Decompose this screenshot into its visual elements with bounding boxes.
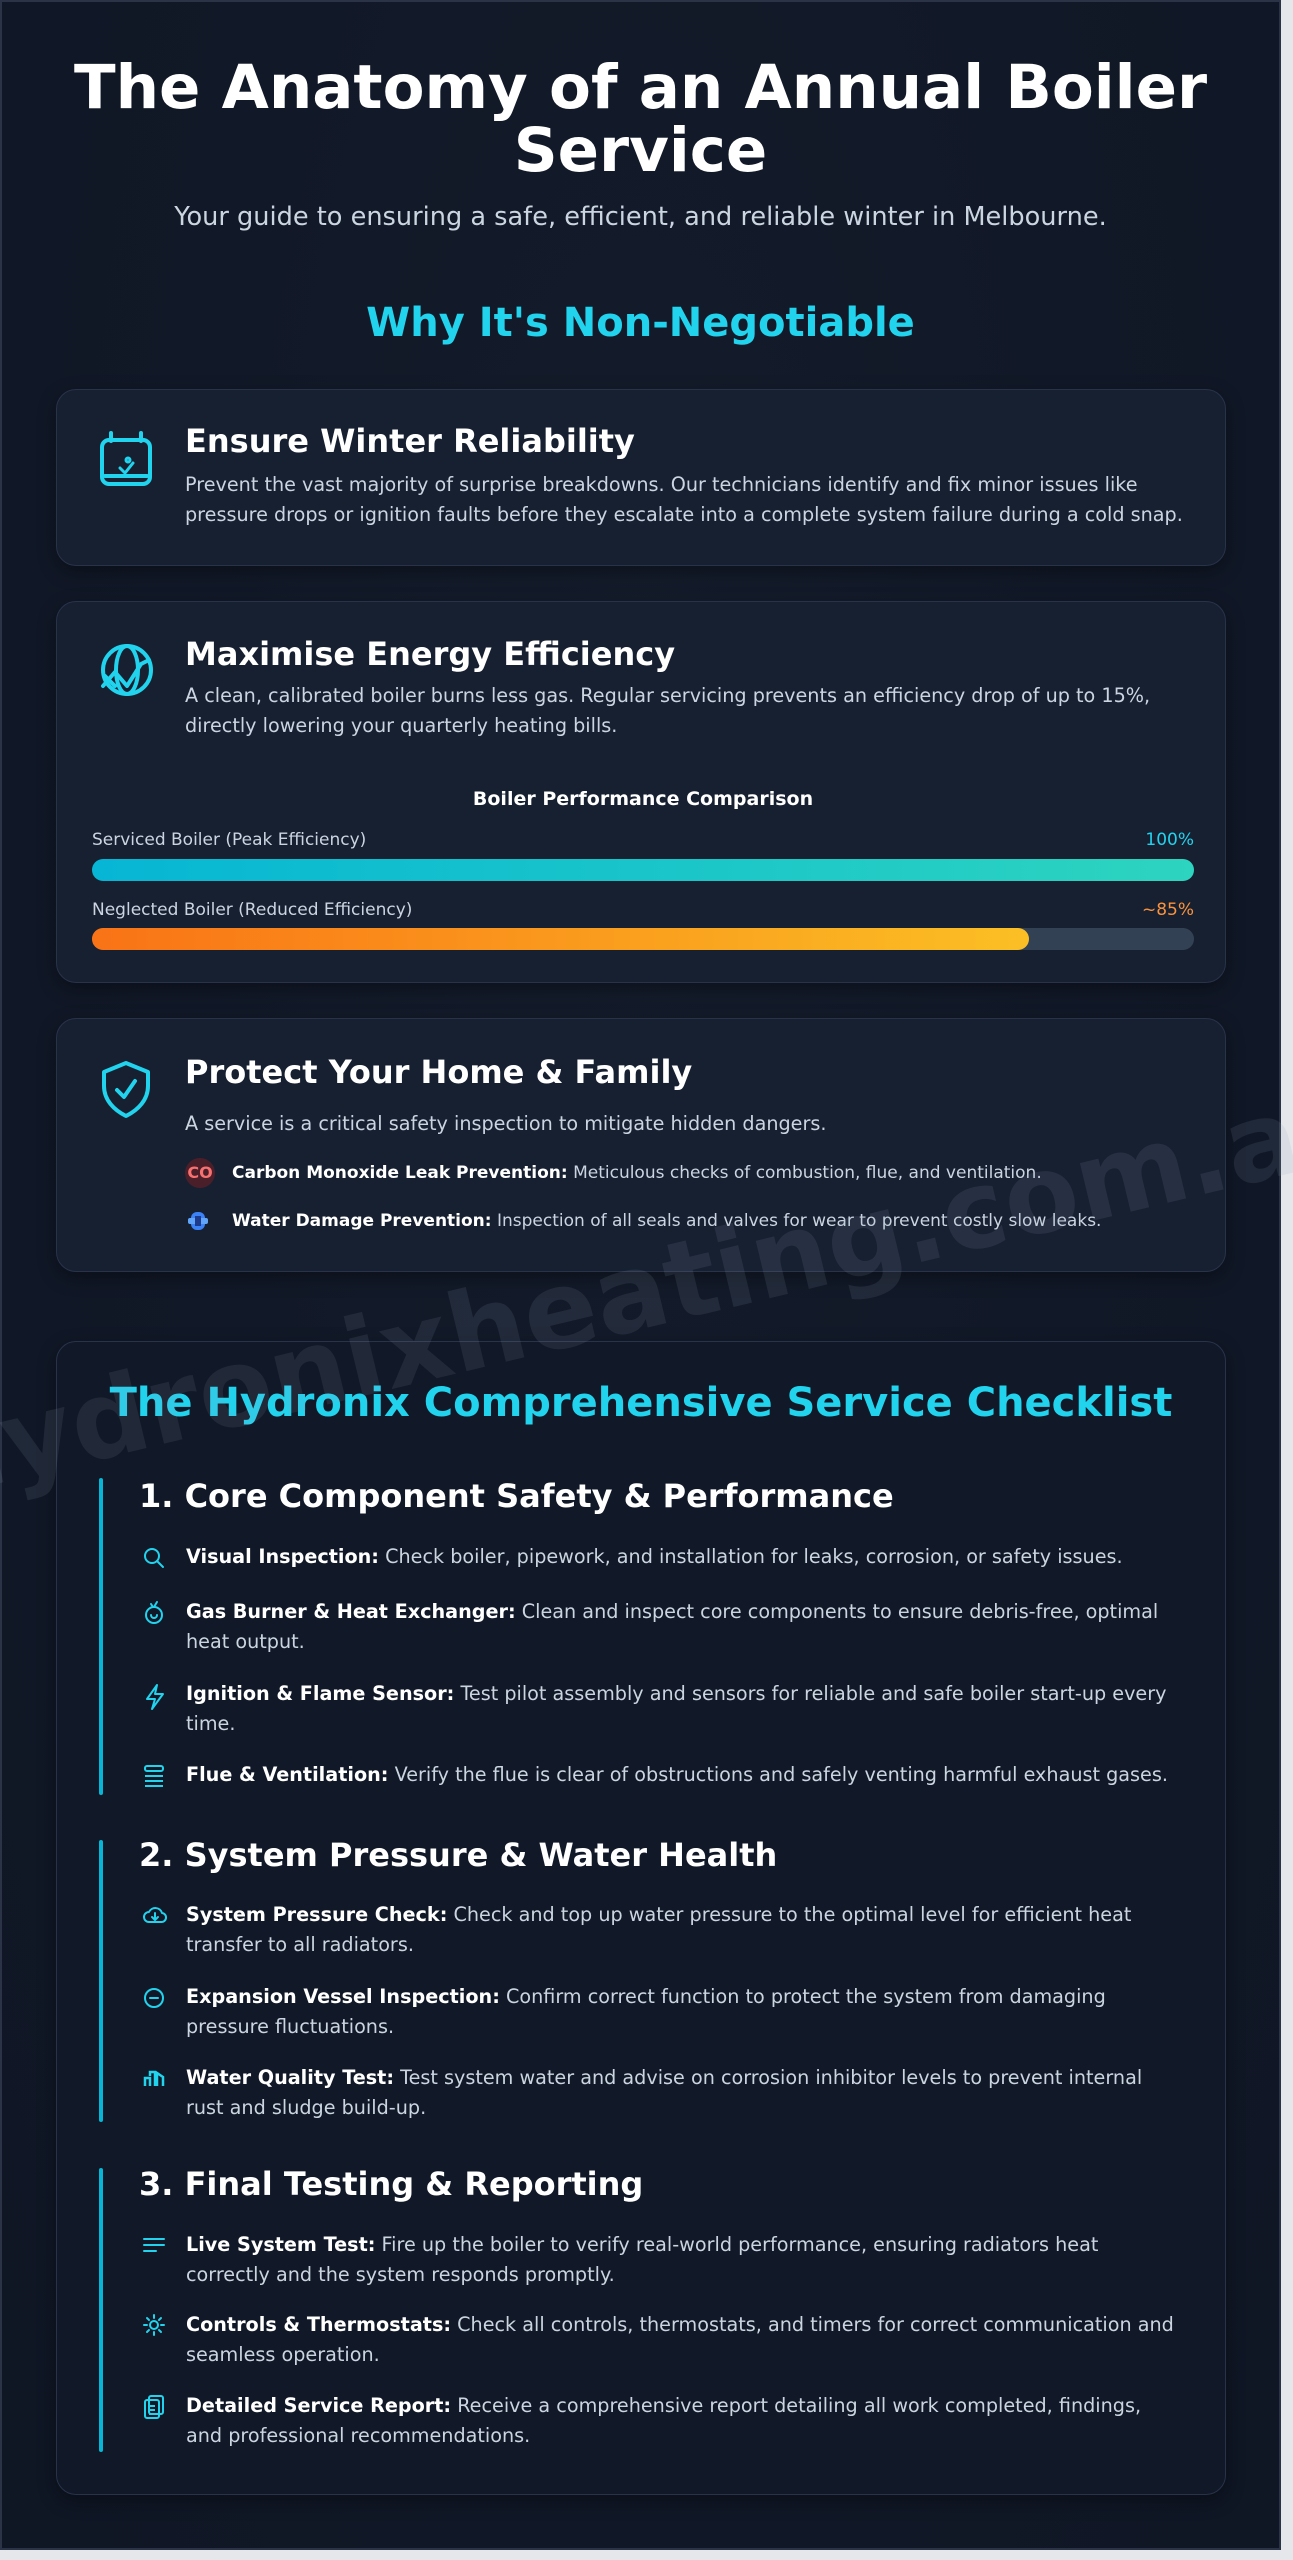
- bar: neglected: Neglected Boiler (Reduced Efficiency): [92, 900, 412, 920]
- icon: CO badge: [185, 1158, 215, 1188]
- item: report: Detailed Service Report: Receive a comprehensive report detailing all work completed, findings,: [186, 2394, 1141, 2417]
- title: Service: [514, 115, 767, 186]
- item: ignition: Ignition & Flame Sensor: Test pilot assembly and sensors for reliable and safe boiler start-up every: [186, 1682, 1166, 1705]
- heading: Maximise Energy Efficiency: [185, 635, 675, 673]
- item: controls: Controls & Thermostats: Check all controls, thermostats, and timers for correct communication and: [186, 2313, 1174, 2336]
- text: pressure drops or ignition faults before they escalate into a complete system failure during a cold snap.: [185, 502, 1183, 526]
- item: pressure: [143, 1903, 1131, 1956]
- item: ignition: time.: [186, 1712, 235, 1734]
- item: pressure: System Pressure Check: Check and top up water pressure to the optimal level for efficient heat: [186, 1903, 1131, 1926]
- item: water: Water Damage Prevention: Inspection of all seals and valves for wear to prevent costly slow leaks.: [232, 1211, 1101, 1231]
- icon: calendar: [100, 431, 152, 486]
- panel: winter reliability: [56, 389, 1226, 566]
- item: live test: Live System Test: Fire up the boiler to verify real-world performance, ensuring radiators heat: [186, 2233, 1098, 2256]
- item: burner: [145, 1600, 1158, 1652]
- text: A service is a critical safety inspection to mitigate hidden dangers.: [185, 1112, 826, 1135]
- item: visual: Visual Inspection: Check boiler, pipework, and installation for leaks, corrosion, or safety issues.: [186, 1545, 1123, 1568]
- item: report: [144, 2394, 1141, 2446]
- panel: checklist: [56, 1341, 1226, 2495]
- checklist title: The Hydronix Comprehensive Service Checklist: [110, 1380, 1172, 1426]
- item: pressure: transfer to all radiators.: [186, 1932, 414, 1956]
- item: live test: [143, 2233, 1098, 2286]
- bar chart: [92, 788, 1194, 950]
- item: water quality: Water Quality Test: Test system water and advise on corrosion inhibitor levels to prevent internal: [186, 2066, 1142, 2089]
- bar: serviced: [92, 830, 1194, 881]
- item: expansion: pressure fluctuations.: [186, 2014, 394, 2038]
- text: directly lowering your quarterly heating bills.: [185, 714, 617, 736]
- text: [185, 473, 1183, 526]
- section 2: pressure & water: [99, 1836, 1142, 2122]
- bar: serviced: 100%: [1145, 830, 1194, 850]
- item: ignition: [146, 1682, 1166, 1734]
- panel: protect home: [56, 1018, 1226, 1272]
- bar: neglected: ~85%: [1142, 900, 1194, 920]
- bar: neglected: [92, 900, 1194, 950]
- item: controls: seamless operation.: [186, 2342, 380, 2366]
- chart title: Boiler Performance Comparison: [473, 788, 813, 810]
- item: burner: heat output.: [186, 1630, 305, 1652]
- item: report: and professional recommendations.: [186, 2424, 530, 2446]
- section 3: testing & reporting: [99, 2165, 1174, 2452]
- subtitle: Your guide to ensuring a safe, efficient, and reliable winter in Melbourne.: [174, 202, 1107, 232]
- text: [185, 684, 1150, 736]
- heading: Protect Your Home & Family: [185, 1053, 692, 1091]
- icon: CO badge: CO: [187, 1163, 213, 1182]
- icon: globe: [100, 644, 153, 696]
- item: expansion: Expansion Vessel Inspection: Confirm correct function to protect the system from damaging: [186, 1985, 1106, 2008]
- heading: 3. Final Testing & Reporting: [139, 2165, 643, 2203]
- item: burner: Gas Burner & Heat Exchanger: Clean and inspect core components to ensure debris-free, optimal: [186, 1600, 1158, 1623]
- icon: shield: [102, 1061, 150, 1118]
- icon: water: [188, 1212, 208, 1230]
- item: water quality: [144, 2066, 1142, 2118]
- bar: serviced: Serviced Boiler (Peak Efficiency): [92, 830, 366, 850]
- item: expansion: [144, 1985, 1106, 2038]
- title: [74, 52, 1207, 186]
- heading: 2. System Pressure & Water Health: [139, 1836, 777, 1874]
- item: CO: Carbon Monoxide Leak Prevention: Meticulous checks of combustion, flue, and ventilation.: [232, 1163, 1042, 1183]
- title: The Anatomy of an Annual Boiler: [74, 52, 1207, 123]
- item: CO: [185, 1158, 1042, 1188]
- section 1: core component: [99, 1477, 1168, 1795]
- text: A clean, calibrated boiler burns less gas. Regular servicing prevents an efficiency drop of up to 15%,: [185, 684, 1150, 707]
- section heading: why: Why It's Non-Negotiable: [366, 300, 915, 346]
- item: flue: Flue & Ventilation: Verify the flue is clear of obstructions and safely venting harmful exhaust gases.: [186, 1763, 1168, 1786]
- item: controls: [143, 2313, 1174, 2366]
- panel: energy efficiency: [56, 601, 1226, 983]
- heading: 1. Core Component Safety & Performance: [139, 1477, 894, 1515]
- item: live test: correctly and the system responds promptly.: [186, 2262, 615, 2286]
- heading: Ensure Winter Reliability: [185, 422, 635, 460]
- item: water quality: rust and sludge build-up.: [186, 2096, 426, 2118]
- text: Prevent the vast majority of surprise breakdowns. Our technicians identify and fix minor issues like: [185, 473, 1138, 496]
